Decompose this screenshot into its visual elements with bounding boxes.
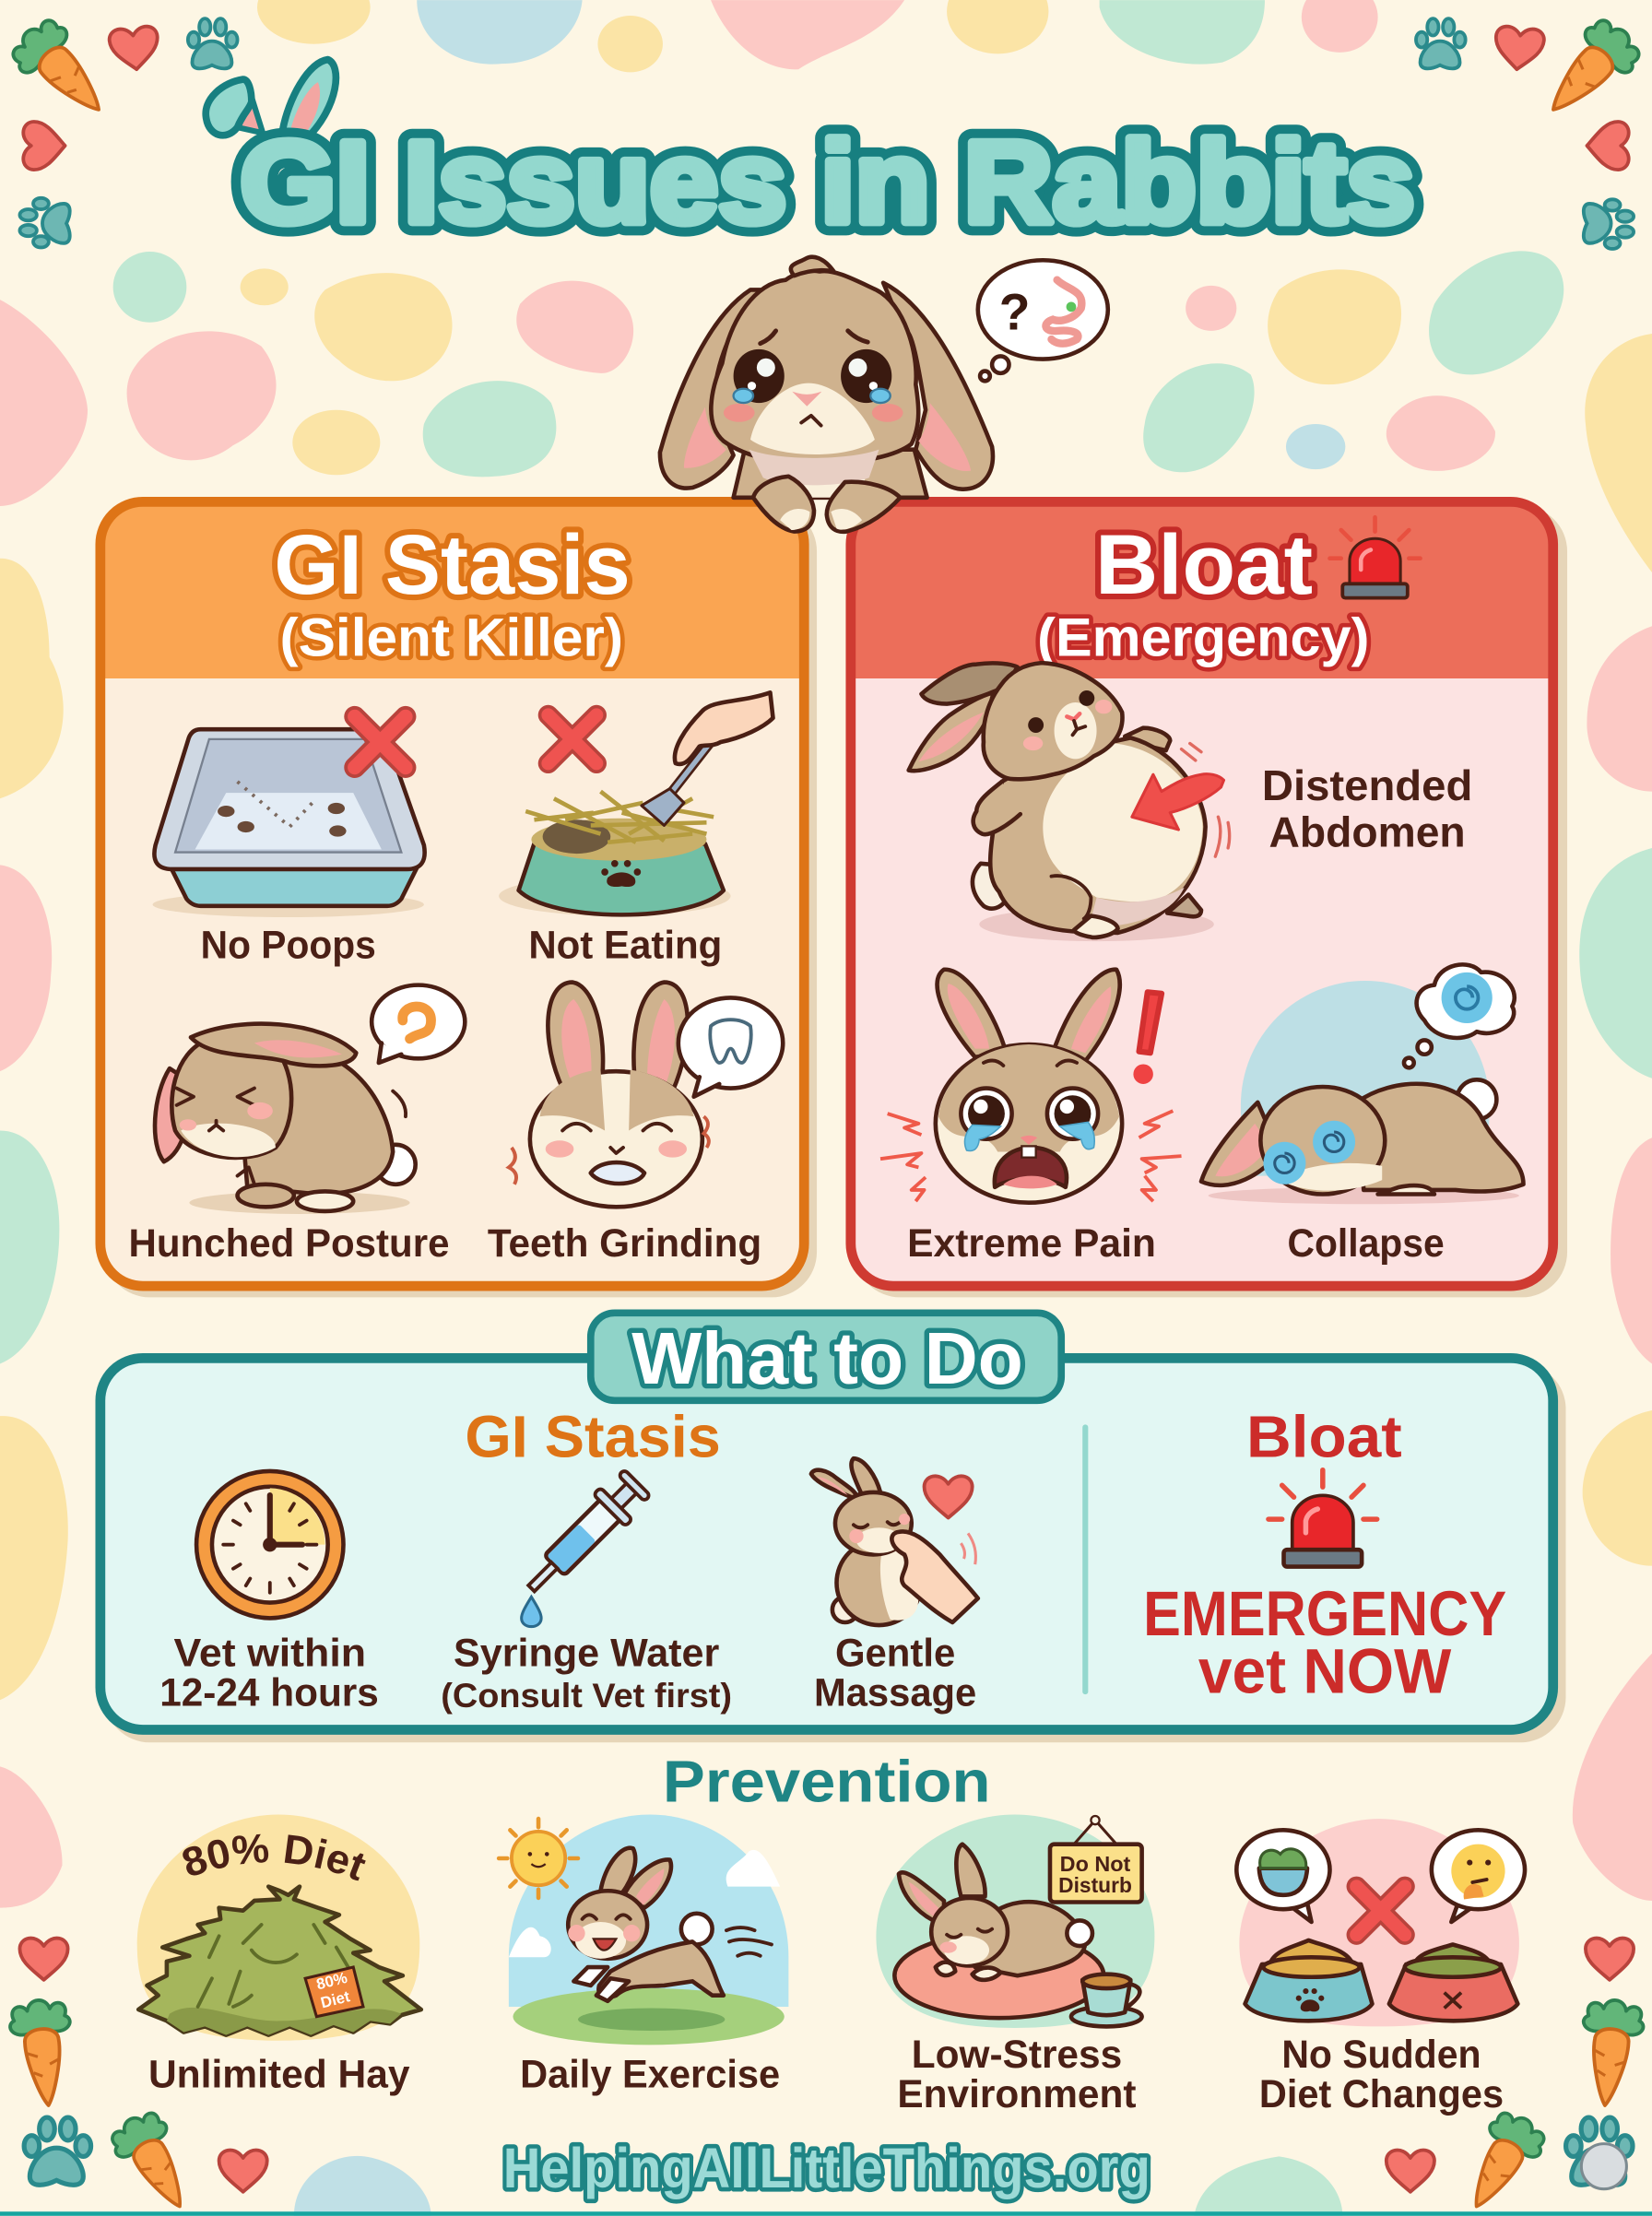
heading: GI Stasis: GI Stasis <box>465 1404 721 1470</box>
panel: GI Stasis <box>100 501 817 1297</box>
icon: syringe <box>515 1467 654 1604</box>
label: Syringe Water <box>441 1632 732 1715</box>
paws on panel edge <box>753 477 900 532</box>
icon: collapsed rabbit <box>1201 964 1524 1204</box>
heading: GI Stasis: GI Stasis <box>274 518 631 612</box>
heading: Bloat: Bloat <box>1246 1404 1402 1470</box>
icon: two food bowls <box>1245 1940 1517 2021</box>
corner decorations: top left <box>5 12 238 247</box>
icon: thinking bubble <box>1432 1830 1525 1922</box>
icon: water drop <box>522 1597 541 1627</box>
corner decorations: bottom right <box>1386 1939 1646 2216</box>
corner decorations: top right <box>1416 12 1647 249</box>
label: Vet within 12-24 hours: Vet within <box>174 1632 366 1676</box>
icon: cushion <box>894 1933 1103 2018</box>
label: Not Eating: Not Eating <box>528 924 722 968</box>
icon: sun <box>499 1819 578 1898</box>
title with bunny ears: GI Issues in Rabbits <box>241 117 1414 247</box>
label: Daily Exercise: Daily Exercise <box>520 2052 780 2096</box>
icon: hay pile <box>138 1887 421 2035</box>
icon: rabbit getting massage <box>811 1458 978 1625</box>
icon: teeth grinding rabbit <box>509 983 783 1207</box>
icon: salad bubble <box>1236 1830 1329 1922</box>
icon: rabbit in extreme pain <box>880 970 1182 1203</box>
icon: Do Not Disturb sign: Disturb <box>1058 1873 1132 1897</box>
label: No Poops: No Poops <box>201 924 376 968</box>
panel: Bloat <box>851 501 1567 1297</box>
label: Low-Stress Environment <box>897 2033 1136 2116</box>
tab: What to Do: What to Do <box>631 1317 1023 1399</box>
icon: empty litter box <box>153 716 425 917</box>
label: No Sudden Diet Changes: Diet Changes <box>1259 2072 1504 2116</box>
icon: Do Not Disturb sign: Do Not <box>1060 1852 1131 1876</box>
prevention: low-stress environment <box>876 1814 1154 2028</box>
prevention: daily exercise <box>499 1814 788 2045</box>
label: Syringe Water: Syringe Water <box>454 1632 720 1676</box>
heading: Bloat: Bloat <box>1095 518 1313 612</box>
icon: untouched food bowl <box>499 692 773 916</box>
label: Distended Abdomen: Distended <box>1262 761 1472 809</box>
footer website: HelpingAllLittleThings.org <box>503 2136 1150 2199</box>
label: No Sudden Diet Changes: No Sudden <box>1281 2033 1481 2077</box>
icon: Do Not Disturb sign <box>1050 1816 1142 1903</box>
icon: sleeping rabbit <box>899 1845 1092 1980</box>
subheading: Emergency: (Emergency) <box>1037 607 1369 667</box>
icon: emergency siren <box>1268 1470 1377 1567</box>
panel: What to Do <box>100 1313 1565 1742</box>
label: Low-Stress Environment: Environment <box>897 2072 1136 2116</box>
icon: hopping rabbit <box>568 1848 772 2001</box>
icon: teacup <box>1071 1974 1142 2026</box>
title with bunny ears: GI Issues in Rabbits <box>241 117 1414 247</box>
icon: hay pile: 80% <box>314 1969 349 1993</box>
prevention: unlimited hay <box>136 1814 424 2041</box>
label: Collapse: Collapse <box>1288 1221 1445 1266</box>
label: Gentle Massage <box>814 1632 976 1715</box>
label: Hunched Posture: Hunched Posture <box>128 1221 449 1266</box>
label: Low-Stress Environment: Low-Stress <box>912 2033 1122 2077</box>
callout: EMERGENCY vet NOW: vet NOW <box>1198 1636 1452 1707</box>
text: 80% Diet: 80% Diet <box>183 1834 366 1880</box>
footer bar <box>0 2211 1652 2216</box>
label: Distended Abdomen: Abdomen <box>1269 807 1466 855</box>
subheading: Silent Killer: (Silent Killer) <box>280 607 623 667</box>
label: Extreme Pain: Extreme Pain <box>907 1221 1156 1266</box>
title with bunny ears <box>206 60 1414 247</box>
label: Gentle Massage: Gentle <box>835 1632 955 1676</box>
label: Vet within 12-24 hours <box>159 1632 379 1715</box>
sad rabbit mascot: ? <box>999 283 1030 340</box>
callout: EMERGENCY vet NOW: EMERGENCY <box>1143 1578 1506 1649</box>
sad rabbit mascot <box>660 257 1108 532</box>
label: Vet within 12-24 hours: 12-24 hours <box>159 1670 379 1715</box>
icon: clock <box>196 1471 344 1618</box>
icon: red siren <box>1329 517 1421 598</box>
label: No Sudden Diet Changes <box>1259 2033 1504 2116</box>
label: Syringe Water: (Consult Vet first) <box>441 1677 732 1715</box>
heading: Prevention: Prevention <box>663 1749 991 1815</box>
prevention: no sudden diet changes <box>1236 1819 1525 2026</box>
corner decorations: bottom left <box>7 1939 267 2216</box>
label: Gentle Massage: Massage <box>814 1670 976 1715</box>
label: Unlimited Hay: Unlimited Hay <box>148 2052 410 2096</box>
icon: bloated rabbit <box>909 663 1230 941</box>
label: Distended Abdomen <box>1262 761 1472 855</box>
icon: hay pile: Diet <box>319 1987 352 2011</box>
callout: EMERGENCY vet NOW <box>1143 1578 1506 1707</box>
label: Teeth Grinding: Teeth Grinding <box>488 1221 761 1266</box>
icon: hunched rabbit <box>155 985 465 1214</box>
